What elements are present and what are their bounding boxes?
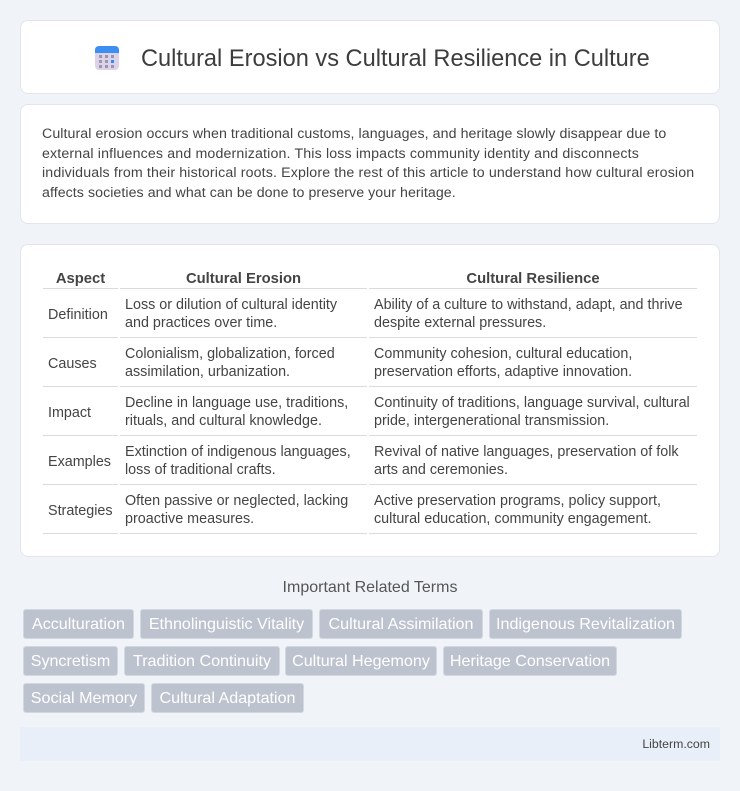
row: impact: Impact xyxy=(48,405,91,421)
tag: Cultural Adaptation xyxy=(160,689,296,707)
tag: Ethnolinguistic Vitality xyxy=(149,615,304,633)
row: strategies: Strategies xyxy=(48,503,113,519)
heading: related terms: Important Related Terms xyxy=(283,579,457,596)
row: definition: and practices over time. xyxy=(125,315,277,331)
tag xyxy=(23,609,134,639)
tag: Tradition Continuity xyxy=(133,652,271,670)
table header: Cultural Erosion xyxy=(186,271,301,287)
row: definition xyxy=(43,297,697,338)
panel: introduction xyxy=(20,104,720,224)
row: impact: Continuity of traditions, language survival, cultural xyxy=(374,395,690,411)
row: strategies xyxy=(43,493,697,534)
row: causes: preservation efforts, adaptive innovation. xyxy=(374,364,632,380)
tag: Syncretism xyxy=(31,652,110,670)
tag xyxy=(489,609,682,639)
tag: Cultural Assimilation xyxy=(329,615,473,633)
row: examples: Examples xyxy=(48,454,111,470)
row: strategies: Active preservation programs, policy support, xyxy=(374,493,661,509)
row: impact xyxy=(43,395,697,436)
row: examples: Extinction of indigenous languages, xyxy=(125,444,351,460)
row: strategies: Often passive or neglected, lacking xyxy=(125,493,348,509)
row: causes: Colonialism, globalization, forced xyxy=(125,346,335,362)
table header: Cultural Resilience xyxy=(466,271,600,287)
row: impact: pride, intergenerational transmission. xyxy=(374,413,609,429)
row: definition: Definition xyxy=(48,307,108,323)
row: examples: Revival of native languages, preservation of folk xyxy=(374,444,679,460)
intro text: external influences and modernization. This loss impacts community identity and disconnects xyxy=(42,146,639,162)
intro text: individuals from their historical roots. Explore the rest of this article to understand how cultural erosion xyxy=(42,165,694,181)
panel: comparison table xyxy=(20,244,720,557)
row: examples xyxy=(43,444,697,485)
tag xyxy=(124,646,280,676)
tag: Indigenous Revitalization xyxy=(496,615,675,633)
row: strategies: proactive measures. xyxy=(125,511,254,527)
row: examples: arts and ceremonies. xyxy=(374,462,508,478)
row: definition: despite external pressures. xyxy=(374,315,546,331)
icon: calendar xyxy=(95,46,119,70)
row: impact: Decline in language use, traditions, xyxy=(125,395,348,411)
tag: Social Memory xyxy=(31,689,137,707)
row: strategies: cultural education, community engagement. xyxy=(374,511,651,527)
tag xyxy=(285,646,437,676)
intro text xyxy=(42,126,694,201)
row: causes xyxy=(43,346,697,387)
related term tags xyxy=(23,609,682,713)
row: causes: assimilation, urbanization. xyxy=(125,364,290,380)
table header: Aspect xyxy=(56,271,105,287)
row: examples: loss of traditional crafts. xyxy=(125,462,276,478)
tag xyxy=(443,646,617,676)
comparison table xyxy=(43,271,697,534)
tag xyxy=(23,683,145,713)
footer credit: Libterm.com xyxy=(642,737,710,751)
row: impact: rituals, and cultural knowledge. xyxy=(125,413,322,429)
intro text: Cultural erosion occurs when traditional customs, languages, and heritage slowly disappear due to xyxy=(42,126,666,142)
tag xyxy=(151,683,304,713)
table header xyxy=(43,271,697,289)
tag xyxy=(140,609,313,639)
footer bar xyxy=(20,727,720,761)
panel: title card xyxy=(20,20,720,94)
intro text: affects societies and what can be done to preserve your heritage. xyxy=(42,185,456,201)
row: definition: Loss or dilution of cultural identity xyxy=(125,297,337,313)
title: Cultural Erosion vs Cultural Resilience in Culture xyxy=(141,46,650,72)
row: definition: Ability of a culture to withstand, adapt, and thrive xyxy=(374,297,683,313)
row: causes: Causes xyxy=(48,356,97,372)
tag: Heritage Conservation xyxy=(450,652,610,670)
tag: Acculturation xyxy=(32,615,125,633)
tag xyxy=(319,609,483,639)
row: causes: Community cohesion, cultural education, xyxy=(374,346,632,362)
tag xyxy=(23,646,118,676)
tag: Cultural Hegemony xyxy=(292,652,430,670)
